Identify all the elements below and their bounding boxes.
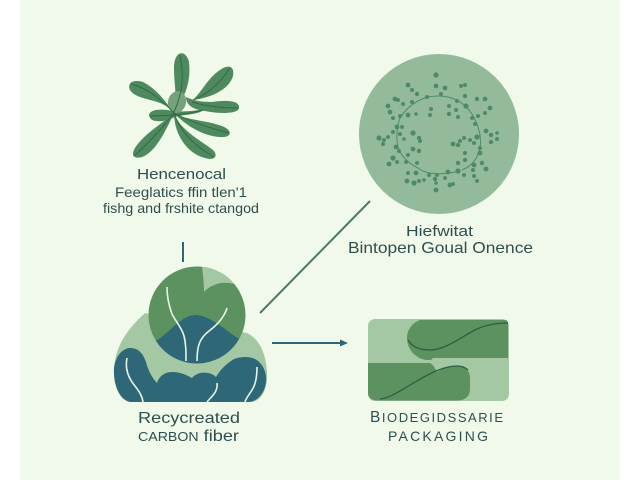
icon: recycled carbon fiber illustration [114,266,267,402]
sphere light wedge [202,267,234,292]
line: vertical tick above carbon fiber icon [182,242,184,262]
leaf veins [126,287,257,402]
heading: plant: Hencenocal [137,166,226,183]
icon: biodegradable packaging [368,319,509,401]
sphere green [148,266,246,364]
heading: biodegradable: BIODEGIDSSARIE [370,409,503,426]
sphere teal base [156,315,239,364]
center leaf [165,89,189,115]
text: carbon fiber: CARBON fiber [138,428,240,445]
text: habitat description: Bintopen Goual Onence [348,240,533,257]
icon: ring of dots and branches [376,72,499,192]
text: plant description line 2: fishg and frshite ctangod [103,200,259,216]
arrow: to packaging [272,340,348,346]
arrow: connector to habitat [260,201,370,313]
heading: habitat: Hiefwitat [406,223,474,240]
text: plant description line 1: Feeglatics ffin tlen'1 [115,184,247,200]
icon: green plant leaves [129,53,239,159]
panel: habitat circle [359,54,519,214]
light mound [114,313,267,402]
text: packaging: PACKAGING [388,428,488,444]
dark teal lobes [114,348,266,402]
lower dark shape [368,363,470,400]
upper dark shape [407,320,508,360]
heading: recycled: Recycreated [138,410,240,427]
